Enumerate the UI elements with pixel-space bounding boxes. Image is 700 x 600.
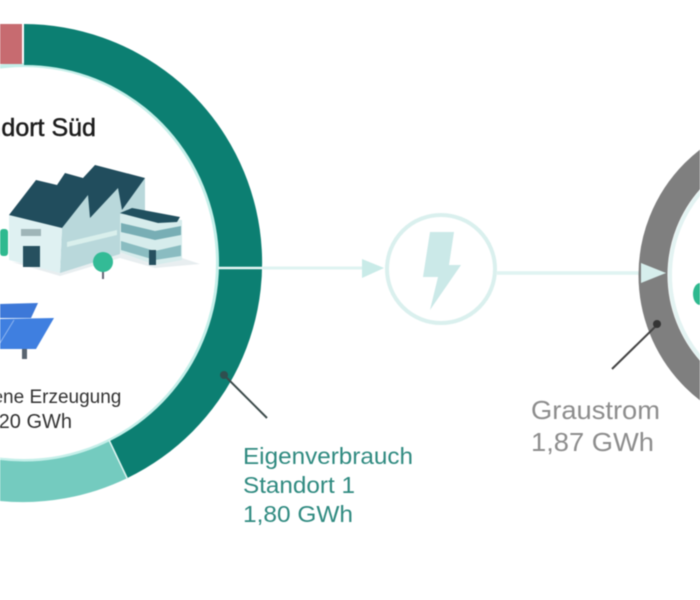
label: Standort 1: Standort 1 — [243, 472, 355, 498]
label: Eigenverbrauch: Eigenverbrauch — [243, 443, 413, 469]
segment divider — [109, 440, 128, 479]
office door — [149, 250, 156, 265]
panel: left site donut — [0, 24, 262, 502]
office building — [120, 214, 182, 265]
segment: light teal export — [0, 441, 128, 502]
tree crown — [93, 252, 113, 272]
ground shadow — [12, 250, 200, 276]
panel stand — [22, 349, 27, 359]
leader dot — [220, 371, 228, 379]
office lower windows — [121, 241, 181, 260]
leader line — [612, 325, 657, 369]
inner pale ring — [670, 148, 700, 402]
tree trunk — [102, 268, 104, 279]
arrow: bolt to right site — [497, 271, 645, 275]
arrow head into right site — [641, 263, 666, 283]
factory front wall — [9, 215, 62, 273]
icon: factory — [0, 165, 200, 279]
label: Graustrom: Graustrom — [531, 395, 660, 425]
factory windows — [67, 230, 117, 247]
grey ring — [653, 131, 700, 419]
arrow: site to bolt — [218, 259, 384, 278]
bolt — [423, 232, 461, 310]
segment: red — [0, 24, 22, 64]
arrow line — [263, 266, 366, 270]
leader: Graustrom — [612, 320, 661, 369]
leader dot — [653, 320, 661, 328]
leader: Eigenverbrauch — [220, 371, 267, 418]
label: Eigenverbrauch value: 1,80 GWh — [243, 501, 353, 527]
icon: solar panels — [0, 303, 54, 359]
panel: right site donut — [653, 131, 700, 419]
panel highlight — [0, 320, 14, 343]
segment: Eigenverbrauch dark teal — [24, 24, 262, 478]
bolt ring — [387, 215, 495, 323]
factory side wall — [60, 178, 145, 273]
green bush — [0, 229, 8, 256]
icon: lightning circle — [387, 215, 495, 323]
pale outline behind ring — [0, 63, 221, 463]
factory roofs — [9, 165, 145, 228]
panel back — [0, 303, 38, 318]
arrow head — [362, 259, 384, 278]
panel front — [0, 318, 54, 349]
tree hint — [693, 283, 700, 305]
office upper windows — [121, 223, 181, 240]
office roof — [120, 208, 180, 223]
white tick on ring — [218, 267, 263, 269]
factory sign — [21, 229, 41, 236]
factory door — [23, 246, 40, 267]
inner white disc — [0, 67, 216, 459]
label: Graustrom value: 1,87 GWh — [531, 427, 654, 457]
leader line — [224, 375, 267, 418]
